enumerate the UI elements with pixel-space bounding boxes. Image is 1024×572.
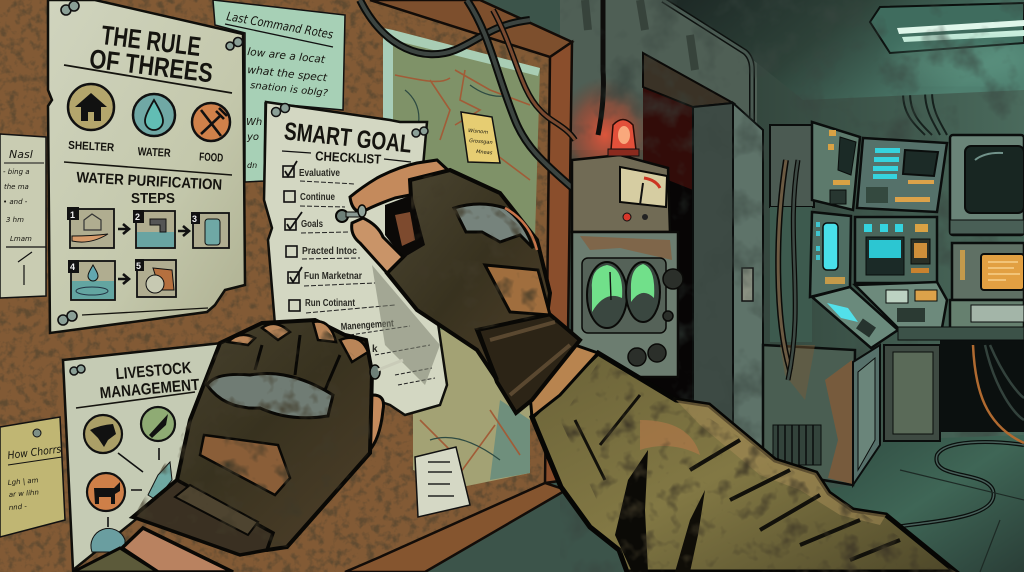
- door soffit: [643, 53, 733, 107]
- pipe above siren: [598, 0, 603, 135]
- item: practed intoc: Practed Intoc: [302, 246, 357, 257]
- console desks: [812, 282, 1024, 348]
- note: last command rotes: yo: [246, 132, 259, 143]
- dark doorway: [590, 87, 693, 420]
- item: fun marketnar: [288, 267, 375, 286]
- label: shelter: SHELTER: [68, 140, 115, 154]
- under desk cables: [940, 340, 1024, 443]
- label: food: FOOD: [199, 151, 223, 165]
- sticky note: Wisnom: [468, 128, 488, 136]
- icon: green: [141, 407, 175, 441]
- step 5: 5: [136, 261, 141, 271]
- note: last command rotes: Last Command Rotes: [225, 9, 334, 42]
- icon: bull: [84, 415, 122, 453]
- finger gap shadow: [385, 195, 425, 258]
- knobs: [628, 269, 683, 366]
- sticky note: Grossgan: [469, 138, 493, 146]
- wrist cuff: [133, 480, 273, 555]
- sticky note: Mneas: [476, 149, 493, 156]
- wall gauge box: [572, 155, 670, 232]
- note: last command rotes: low are a locat: [247, 46, 326, 66]
- rear wall: [757, 60, 1024, 460]
- note: left handwritten: - bing a: [3, 168, 30, 176]
- arrow 2 to 3: [178, 226, 189, 236]
- right gloved hand: [350, 160, 580, 413]
- shadow of hand on paper: [372, 265, 440, 385]
- arrows: [108, 448, 159, 527]
- note: last command rotes: snation is oblg?: [250, 80, 328, 99]
- console panel: mid centre: [855, 217, 937, 283]
- poster: livestock management: [63, 343, 240, 570]
- strip light: [870, 3, 1024, 82]
- item: continue: [284, 191, 345, 207]
- red siren light: [608, 120, 639, 156]
- left gloved hand: [130, 320, 384, 555]
- item: continue: Continue: [300, 192, 335, 203]
- right green gauge: [626, 262, 660, 322]
- ceiling: [663, 0, 1024, 100]
- wrist skin strip: [530, 345, 598, 417]
- item: run cotinant: [289, 298, 395, 313]
- subheading: water purification: WATER PURIFICATION: [76, 169, 223, 194]
- right arm sleeve: [532, 353, 960, 572]
- map pinned on board: [383, 28, 540, 490]
- step 3: [191, 212, 229, 248]
- glove grime: [136, 327, 370, 547]
- step 1: [67, 207, 114, 248]
- glove grime: [411, 174, 540, 330]
- glove back: [387, 170, 550, 380]
- icon: water: [133, 94, 175, 136]
- arrow 1 to 2: [118, 224, 129, 234]
- poster title: THE RULE: [100, 20, 203, 62]
- index finger: [350, 160, 450, 212]
- concrete door jamb: [693, 103, 763, 490]
- poster title line two: OF THREES: [88, 44, 214, 89]
- heading: smart goal: SMART GOAL: [283, 117, 413, 159]
- fingertips: [228, 321, 368, 362]
- item: run cotinant: Run Cotinant: [305, 298, 356, 309]
- item: evaluative: Evaluative: [299, 168, 340, 179]
- thumb: [352, 218, 403, 273]
- left green gauge: [587, 262, 627, 328]
- wall switch plate: [742, 268, 753, 301]
- note: how chores: ar w lihn: [8, 488, 39, 499]
- cables over the frame: [360, 0, 575, 190]
- heading: checklist: CHECKLIST: [315, 148, 382, 167]
- note: how chores: nnd -: [8, 502, 28, 512]
- step 5: [135, 259, 176, 297]
- left forearm and sleeve: [73, 528, 233, 572]
- console panel: upper left: [812, 122, 860, 210]
- note: left handwritten: • and -: [3, 198, 28, 206]
- pin: livestock: [70, 365, 85, 375]
- icon: teal: [148, 462, 172, 500]
- arrow 4 to 5: [118, 274, 129, 284]
- console panel: upper centre: [857, 138, 947, 212]
- console right with orange screen: [952, 243, 1024, 300]
- step 4: [68, 260, 115, 300]
- item: fun marketnar: Fun Marketnar: [304, 271, 362, 282]
- concrete wall beside board: [560, 0, 757, 150]
- note: last command rotes: dn: [247, 161, 257, 170]
- note: last command rotes: [213, 0, 345, 182]
- thumb: [353, 395, 384, 452]
- knuckle armour: [454, 204, 533, 248]
- wooden frame: [345, 0, 572, 572]
- step 1: 1: [70, 210, 75, 220]
- note: left handwritten: the ma: [4, 183, 29, 191]
- push pin held by fingers: [336, 205, 366, 222]
- icon: food: [192, 103, 230, 141]
- item: practed intoc: [286, 246, 360, 259]
- note: left handwritten: Nasl: [9, 148, 33, 161]
- item: manengement: Manengement: [340, 318, 395, 333]
- poster: smart goal checklist: [264, 102, 447, 415]
- corkboard: [0, 0, 570, 572]
- step 2: 2: [135, 212, 140, 222]
- wall box with hanging cables: [770, 125, 814, 380]
- finger separators: [255, 335, 340, 390]
- note: how chores: How Chorrs: [7, 443, 62, 462]
- note: how chores: [0, 417, 65, 537]
- icon: bottom: [91, 528, 125, 552]
- note: left handwritten: [0, 134, 46, 298]
- pin on lower checklist: [370, 360, 403, 379]
- poster title line two: MANAGEMENT: [99, 377, 200, 402]
- subheading: steps: STEPS: [131, 190, 175, 207]
- note: left handwritten: Lmam: [10, 235, 32, 243]
- pins: smart goal: [272, 104, 428, 137]
- CRT monitor: [950, 135, 1024, 235]
- grime on concrete and room: [560, 0, 1024, 572]
- lower map legend note: [415, 447, 470, 517]
- icon: cow: [87, 473, 125, 511]
- label: water: WATER: [137, 146, 172, 160]
- sticky note: [461, 112, 500, 163]
- note: left handwritten: 3 hm: [6, 216, 24, 224]
- step 2: [133, 210, 175, 248]
- palm patch: [200, 435, 290, 495]
- item: evaluative: [283, 161, 355, 184]
- step 3: 3: [192, 214, 197, 224]
- poster title: LIVESTOCK: [115, 360, 193, 383]
- poster: the rule of threes: [48, 0, 245, 333]
- pins: rule of threes: [58, 1, 242, 325]
- floor: [815, 435, 1024, 572]
- note: last command rotes: Wh: [246, 117, 262, 128]
- console panel: mid left cyan screen: [810, 212, 851, 297]
- wrist cuff: [477, 312, 580, 413]
- step 4: 4: [70, 262, 75, 272]
- wall conduit pipes: [663, 0, 752, 140]
- item: check: k: [372, 344, 378, 355]
- red siren glow: [555, 77, 655, 193]
- item: goals: [285, 212, 350, 233]
- knuckle armour: [207, 374, 333, 418]
- orange wrist patch: [485, 265, 550, 315]
- rusty green gauge panel: [572, 232, 683, 377]
- note: how chores: Lgh | am: [7, 476, 39, 487]
- note: last command rotes: what the spect: [247, 64, 328, 84]
- icon: shelter: [68, 84, 114, 130]
- lower console cabinet: [763, 345, 940, 485]
- item: goals: Goals: [301, 219, 323, 230]
- sleeve highlights and folds: [575, 395, 900, 572]
